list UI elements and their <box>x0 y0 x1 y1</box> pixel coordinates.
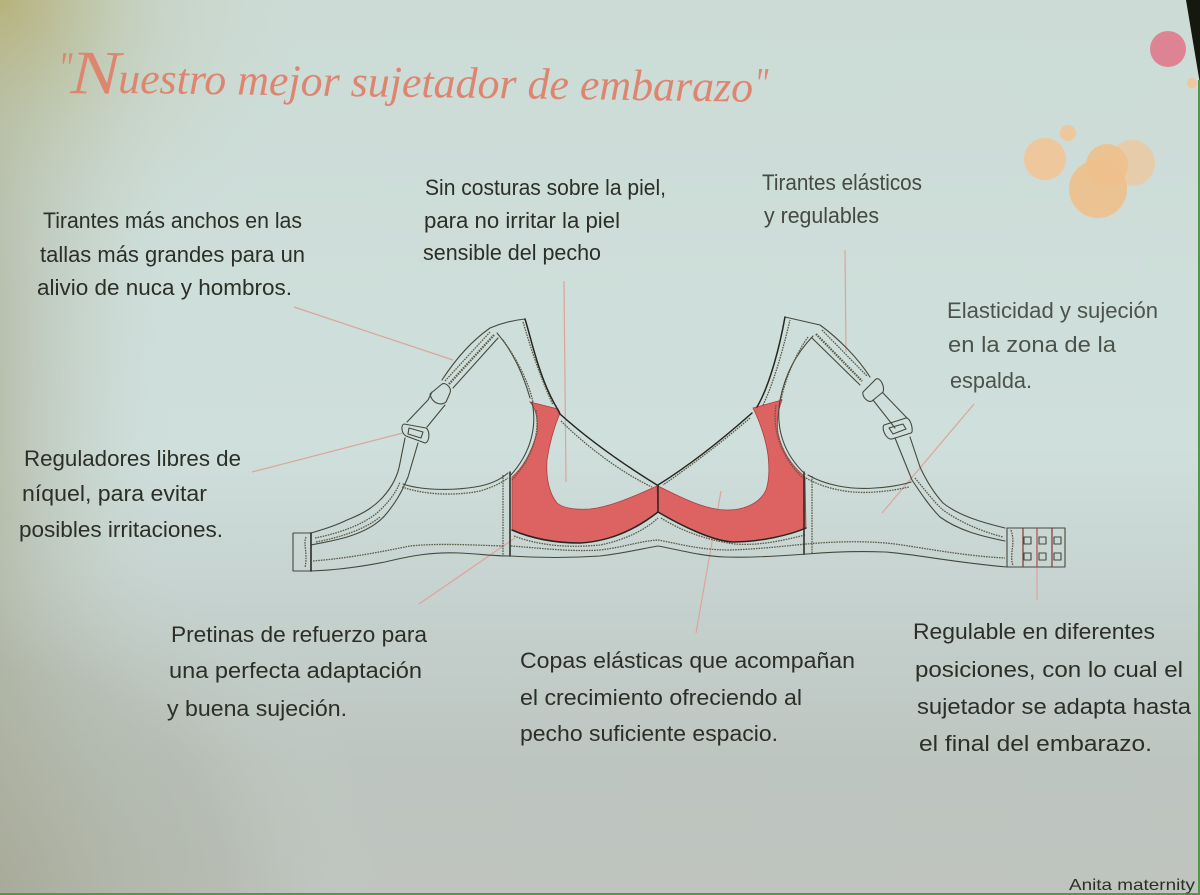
title: " <box>58 43 73 92</box>
title <box>58 39 769 117</box>
callout: adjustable positions: posiciones, con lo cual el <box>915 657 1183 682</box>
title: uestro mejor sujetador de embarazo <box>118 54 753 112</box>
callout: reinforcement bands <box>167 622 427 721</box>
left cup and underband seams <box>402 402 658 558</box>
callout: adjustable positions: el final del embarazo. <box>919 731 1152 756</box>
callout: reinforcement bands: y buena sujeción. <box>167 696 347 721</box>
callout: wider straps <box>37 208 305 300</box>
callout: elastic cups <box>520 648 855 746</box>
callout: reinforcement bands: Pretinas de refuerzo para <box>171 622 427 647</box>
callout: nickel-free adjusters: posibles irritaciones. <box>19 517 223 542</box>
callout: nickel-free adjusters <box>19 446 241 542</box>
callout: adjustable positions: sujetador se adapta hasta <box>917 694 1192 719</box>
callout: back support <box>947 298 1158 393</box>
callout: wider straps: tallas más grandes para un <box>40 242 305 267</box>
callout: elastic straps <box>762 170 922 228</box>
right wing outline <box>658 437 1065 567</box>
callout: adjustable positions: Regulable en diferentes <box>913 619 1155 644</box>
left strap and neck <box>402 319 657 487</box>
bra diagram <box>293 317 1065 571</box>
right cup and underband seams <box>775 400 911 492</box>
title: " <box>754 59 769 108</box>
callout: seamless: Sin costuras sobre la piel, <box>425 175 666 200</box>
callout: reinforcement bands: una perfecta adaptación <box>169 658 422 683</box>
callout: back support: Elasticidad y sujeción <box>947 298 1158 323</box>
footer brand: Anita maternity <box>1069 877 1195 894</box>
left wing outline <box>293 438 510 571</box>
callout: nickel-free adjusters: Reguladores libres de <box>24 446 241 471</box>
red panel: right cup <box>658 400 806 542</box>
callout: seamless: para no irritar la piel <box>424 208 620 233</box>
callout: elastic straps: y regulables <box>764 203 879 228</box>
callout: adjustable positions <box>913 619 1192 756</box>
callout: seamless: sensible del pecho <box>423 240 601 265</box>
leader lines <box>252 250 1037 633</box>
red panel: left cup <box>512 402 658 543</box>
callout: back support: espalda. <box>950 368 1032 393</box>
right strap and neck <box>658 317 912 485</box>
callout: wider straps: Tirantes más anchos en las <box>43 208 302 233</box>
title: N <box>69 39 125 108</box>
decorative circles <box>1024 31 1197 218</box>
callout: seamless <box>423 175 666 265</box>
callout: back support: en la zona de la <box>948 332 1117 357</box>
callout: elastic cups: el crecimiento ofreciendo al <box>520 685 802 710</box>
callout: elastic straps: Tirantes elásticos <box>762 170 922 195</box>
callout: wider straps: alivio de nuca y hombros. <box>37 275 292 300</box>
callout: elastic cups: pecho suficiente espacio. <box>520 721 778 746</box>
callout: nickel-free adjusters: níquel, para evitar <box>22 481 208 506</box>
callout: elastic cups: Copas elásticas que acompañan <box>520 648 855 673</box>
